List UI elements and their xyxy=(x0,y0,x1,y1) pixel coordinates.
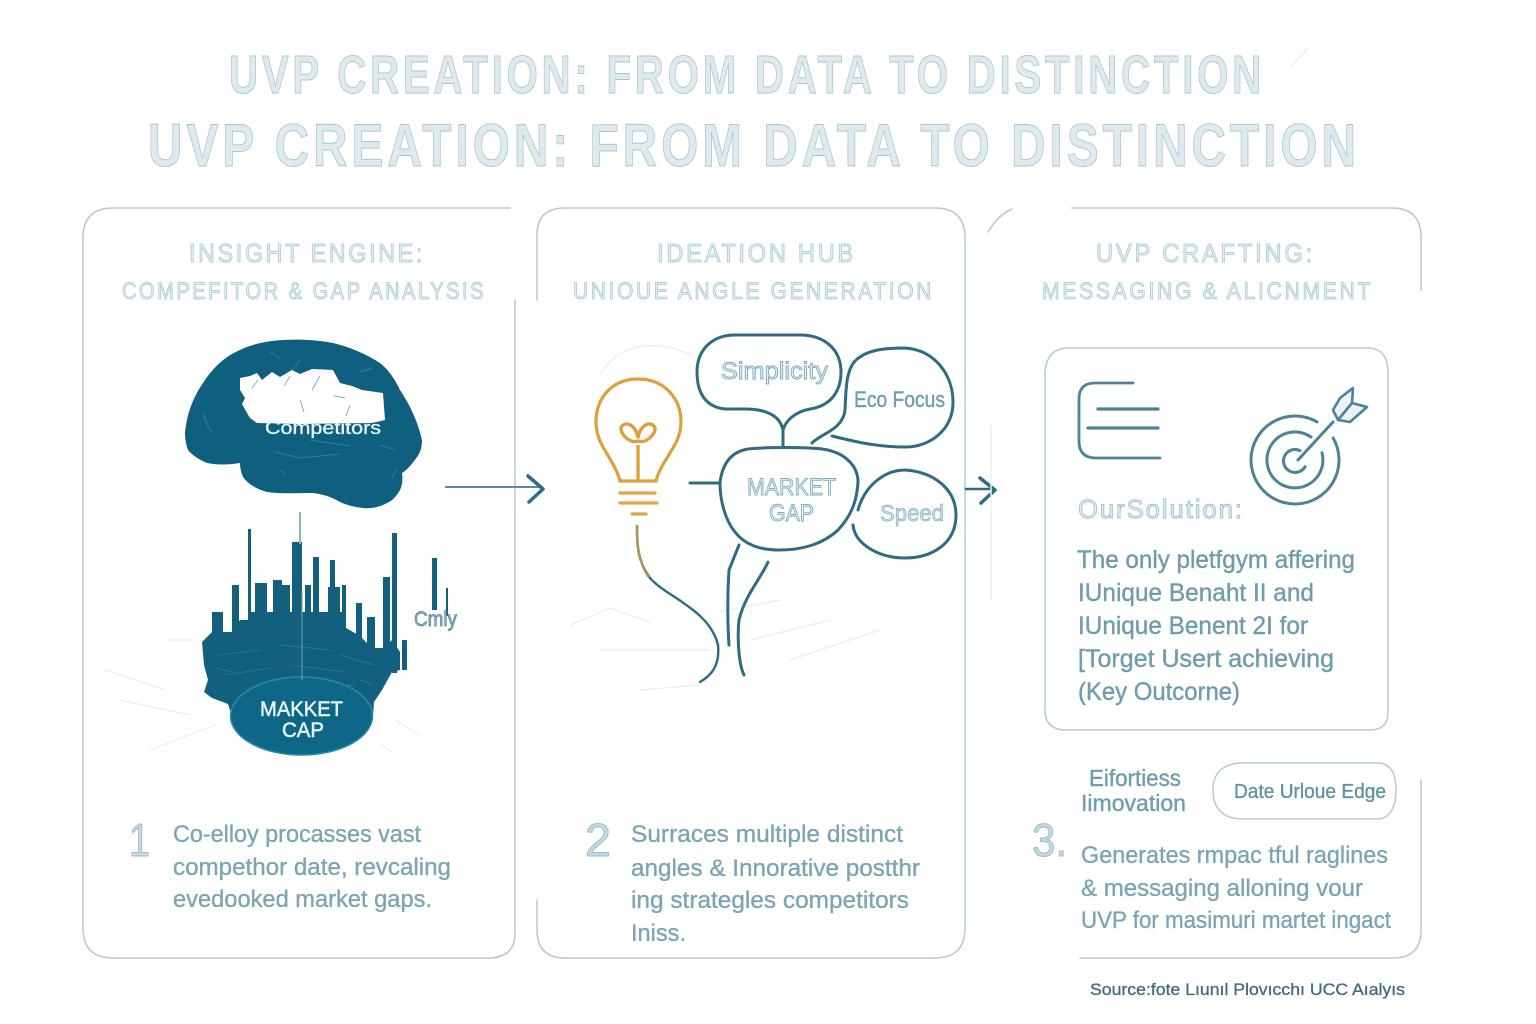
icon: brain: Competitors xyxy=(265,417,381,438)
step 2 description: Surraces multiple distinct xyxy=(631,821,903,848)
icon: target and arrow xyxy=(1251,388,1367,504)
chart: city of market data bars: MAKKET xyxy=(260,698,343,721)
solution text: IUnique Benaht II and xyxy=(1078,579,1314,607)
icon: light bulb xyxy=(570,345,880,690)
arrow: panel 1 to panel 2 xyxy=(445,476,543,502)
panel 1 heading: INSIGHT ENGINE: xyxy=(189,238,425,268)
panel 3 heading xyxy=(1042,238,1373,305)
solution text: (Key Outcorne) xyxy=(1078,678,1240,706)
panel 2 heading xyxy=(573,238,934,305)
panel 1 heading xyxy=(122,238,486,305)
solution card xyxy=(1045,348,1388,730)
step 3 description: & messaging alloning vour xyxy=(1081,875,1363,902)
tag: effortless innovation: Eifortiess xyxy=(1089,765,1181,791)
panel: ideation hub xyxy=(537,208,965,958)
tag: effortless innovation xyxy=(1081,765,1186,816)
step 1 description: Co-elloy procasses vast xyxy=(173,821,421,848)
title xyxy=(148,45,1360,179)
bubble text: Simplicity xyxy=(721,358,828,385)
solution text: IUnique Benent 2I for xyxy=(1078,612,1308,640)
step 2 description: 2 xyxy=(585,814,611,866)
step 1 description xyxy=(129,814,451,913)
bubble text: Speed xyxy=(880,500,944,526)
panel 2 heading: IDEATION HUB xyxy=(657,238,856,268)
tag: data unique edge: Date Urloue Edge xyxy=(1234,781,1386,803)
panel 3 heading: MESSAGING & ALICNMENT xyxy=(1042,278,1373,305)
bubble text xyxy=(721,358,945,527)
step 1 description: compethor date, revcaling xyxy=(173,854,451,881)
bubble text: Eco Focus xyxy=(854,387,945,412)
step 3 description: 3. xyxy=(1032,814,1067,866)
bubble text: GAP xyxy=(769,500,814,527)
icon: message lines xyxy=(1079,383,1160,458)
step 1 description: 1 xyxy=(129,814,150,866)
tag: effortless innovation: Iimovation xyxy=(1081,790,1186,816)
step 2 description xyxy=(585,814,920,947)
panel 2 heading: UNIOUE ANGLE GENERATION xyxy=(573,278,934,305)
panel: uvp crafting xyxy=(988,208,1421,958)
diagram: market gap idea bubbles xyxy=(690,335,956,675)
solution text: The only pletfgym affering xyxy=(1077,546,1355,574)
step 1 description: evedooked market gaps. xyxy=(173,886,432,913)
icon: brain xyxy=(185,340,422,508)
bubble text: MARKET xyxy=(747,474,836,501)
panel 3 heading: UVP CRAFTING: xyxy=(1096,238,1315,268)
step 3 description: UVP for masimuri martet ingact xyxy=(1081,907,1391,934)
step 2 description: Iniss. xyxy=(631,920,686,947)
solution text: [Torget Usert achieving xyxy=(1078,645,1334,673)
chart: city of market data bars: Cmly xyxy=(414,608,457,631)
arrow: panel 2 to panel 3 xyxy=(965,478,995,503)
step 3 description xyxy=(1032,814,1391,934)
panel 1 heading: COMPEFITOR & GAP ANALYSIS xyxy=(122,278,486,305)
solution text xyxy=(1077,546,1355,706)
step 2 description: angles & Innorative postthr xyxy=(631,855,920,882)
panel: insight engine xyxy=(83,208,515,958)
solution label: OurSolution: xyxy=(1078,494,1244,524)
chart: city of market data bars xyxy=(105,512,457,755)
source note: Source:fote Lıunıl Plovıcchı UCC Aıalyıs xyxy=(1090,980,1405,999)
step 3 description: Generates rmpac tful raglines xyxy=(1081,842,1388,869)
step 2 description: ing strategles competitors xyxy=(631,887,909,914)
chart: city of market data bars: CAP xyxy=(282,719,324,742)
tag: data unique edge xyxy=(1213,763,1396,819)
